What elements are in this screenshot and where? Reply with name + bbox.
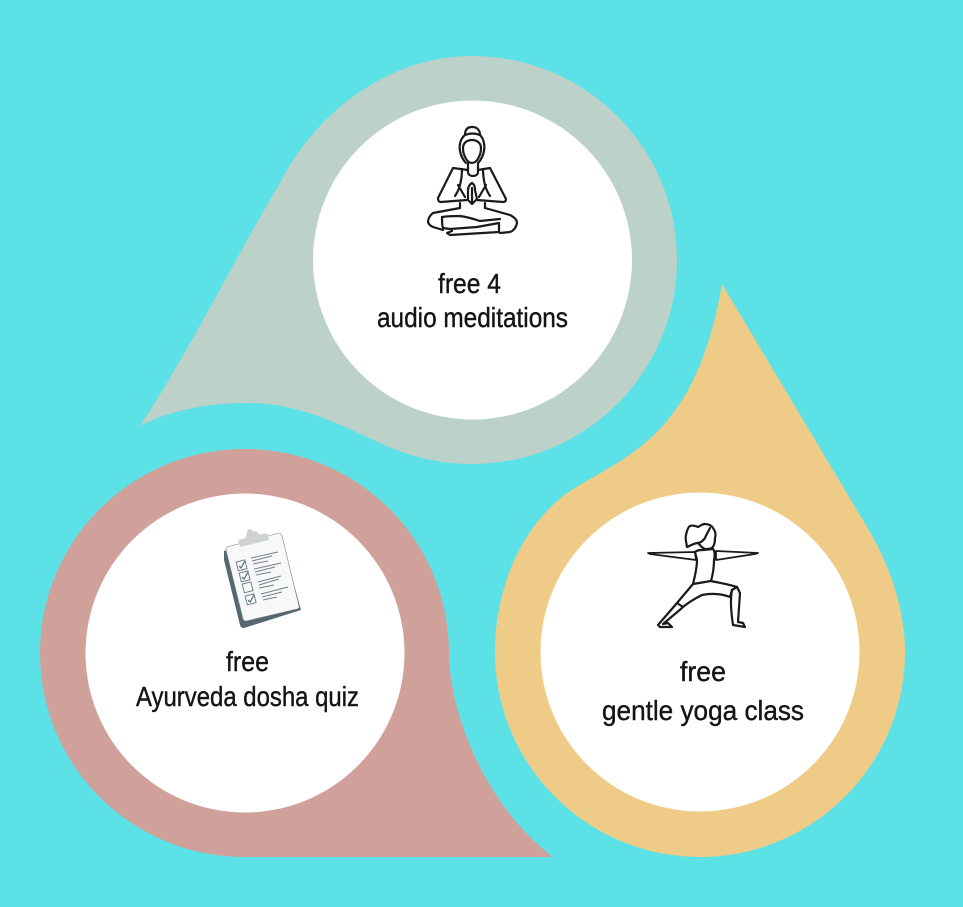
white circle xyxy=(313,100,632,420)
icon: meditating woman xyxy=(428,127,517,235)
text: free Ayurveda dosha quiz xyxy=(136,646,359,712)
white circle xyxy=(86,494,404,812)
text: free 4 audio meditations: free 4 xyxy=(438,268,501,299)
text: free gentle yoga class xyxy=(602,656,804,726)
panel: dosha quiz xyxy=(40,449,553,857)
icon: clipboard checklist xyxy=(224,529,301,628)
yellow drop xyxy=(495,284,905,857)
icon: warrior pose xyxy=(648,524,758,627)
text: free Ayurveda dosha quiz: Ayurveda dosha quiz xyxy=(136,681,359,712)
text: free Ayurveda dosha quiz: free xyxy=(226,646,269,677)
white circle xyxy=(540,492,860,812)
text: free 4 audio meditations: audio meditations xyxy=(377,302,568,333)
red drop xyxy=(40,449,553,857)
text: free 4 audio meditations xyxy=(377,268,568,333)
green drop xyxy=(140,56,677,464)
text: free gentle yoga class: gentle yoga class xyxy=(602,695,804,726)
panel: audio meditations xyxy=(140,56,677,464)
text: free gentle yoga class: free xyxy=(680,656,726,687)
panel: gentle yoga class xyxy=(495,284,905,857)
